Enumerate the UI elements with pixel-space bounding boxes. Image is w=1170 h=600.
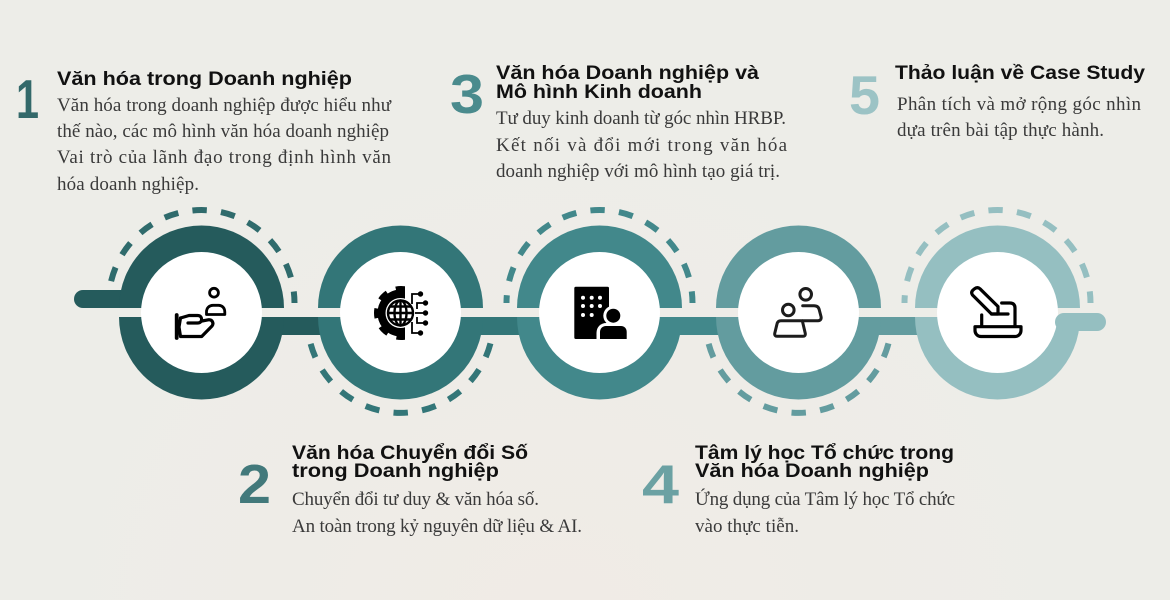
number 2: 2: [238, 453, 271, 515]
step 3 ring: [506, 210, 692, 400]
body 1: Vai trò của lãnh đạo trong định hình văn: [57, 147, 392, 168]
heading 4: [695, 443, 954, 482]
body 4: [695, 488, 955, 537]
body 1: [57, 95, 392, 195]
heading 3: [496, 63, 759, 103]
step 4 ring: [708, 225, 889, 413]
timeline end cap: [1055, 313, 1106, 331]
step 5 text block: [849, 63, 1145, 141]
heading 4: Tâm lý học Tổ chức trong: [695, 443, 954, 464]
heading 5: Thảo luận về Case Study: [895, 63, 1145, 84]
step 5 ring: [904, 210, 1090, 400]
heading 2: [292, 443, 528, 482]
body 2: [292, 489, 582, 537]
body 3: Tư duy kinh doanh từ góc nhìn HRBP.: [496, 108, 786, 129]
body 5: [897, 94, 1142, 141]
body 3: Kết nối và đổi mới trong văn hóa: [496, 135, 788, 156]
body 1: Văn hóa trong doanh nghiệp được hiểu như: [57, 95, 392, 116]
body 1: thế nào, các mô hình văn hóa doanh nghiệp: [57, 121, 389, 142]
step 2 text block: [238, 443, 582, 537]
step 1 ring: [111, 210, 294, 399]
body 1: hóa doanh nghiệp.: [57, 174, 199, 195]
icon: pen and tablet: [972, 288, 1021, 336]
step 1 text block: [16, 68, 392, 195]
step 3 text block: [450, 63, 788, 182]
body 3: [496, 108, 788, 182]
heading 1: Văn hóa trong Doanh nghiệp: [57, 69, 352, 90]
heading 2: trong Doanh nghiệp: [292, 461, 499, 482]
icon: two people: [775, 288, 821, 336]
body 4: vào thực tiễn.: [695, 516, 799, 537]
heading 4: Văn hóa Doanh nghiệp: [695, 461, 929, 482]
step 2 ring: [310, 226, 491, 413]
body 2: An toàn trong kỷ nguyên dữ liệu & AI.: [292, 516, 582, 537]
body 3: doanh nghiệp với mô hình tạo giá trị.: [496, 161, 780, 182]
heading 3: Văn hóa Doanh nghiệp và: [496, 63, 759, 84]
timeline connector line: [74, 290, 930, 335]
number 1: 1: [16, 68, 39, 130]
number 3: 3: [450, 63, 484, 125]
body 5: Phân tích và mở rộng góc nhìn: [897, 94, 1142, 115]
icon: hand holding person: [177, 288, 225, 338]
number 4: 4: [642, 453, 679, 515]
icon: building and person: [574, 287, 627, 340]
heading 2: Văn hóa Chuyển đổi Số: [292, 443, 528, 464]
body 2: Chuyển đổi tư duy & văn hóa số.: [292, 489, 539, 510]
body 5: dựa trên bài tập thực hành.: [897, 120, 1104, 141]
number 5: 5: [849, 64, 880, 126]
icon: gear globe circuit: [377, 289, 428, 337]
body 4: Ứng dụng của Tâm lý học Tổ chức: [695, 488, 955, 510]
heading 3: Mô hình Kinh doanh: [496, 82, 702, 103]
step 4 text block: [642, 443, 955, 537]
